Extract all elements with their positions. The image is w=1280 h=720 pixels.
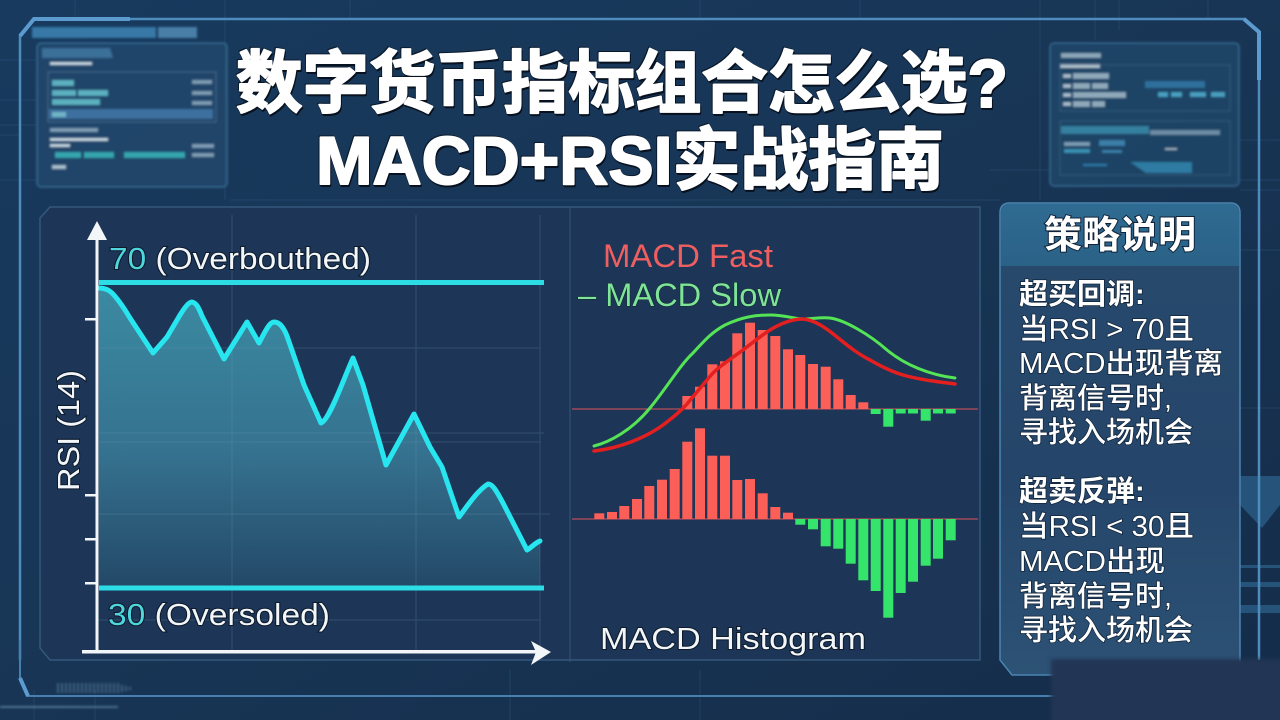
text block: oversold (1019, 475, 1194, 647)
panel body (1000, 203, 1240, 675)
panel: top-left dashboard (32, 27, 227, 187)
title: 数字货币指标组合怎么选? (236, 46, 1008, 122)
oversold line (99, 586, 544, 590)
panel: strategy notes (1000, 203, 1240, 675)
RSI shaded area (99, 288, 540, 588)
upper histogram red bars (682, 323, 868, 409)
label: MACD Histogram: MACD Histogram (600, 621, 866, 656)
text block: overbought (1019, 278, 1223, 449)
text block: overbought: 超买回调: (1019, 278, 1145, 311)
axes (82, 221, 551, 665)
legend: MACD Slow: – MACD Slow (578, 277, 782, 313)
right side decorative bands (1240, 476, 1280, 613)
text block: overbought: 背离信号时, (1019, 382, 1172, 415)
panel: charts (40, 207, 980, 662)
text block: oversold: 超卖反弹: (1019, 475, 1145, 508)
overbought line (99, 280, 544, 285)
MACD fast curve (594, 319, 955, 451)
text block: oversold: 背离信号时, (1019, 580, 1172, 613)
legend: MACD Fast: MACD Fast (603, 238, 773, 274)
RSI curve (99, 288, 540, 550)
lower histogram red bars (594, 428, 793, 519)
title (236, 46, 1008, 199)
text block: oversold: 寻找入场机会 (1019, 614, 1193, 647)
heading: 策略说明 (1044, 215, 1196, 257)
MACD slow curve (594, 315, 955, 446)
text block: overbought: MACD出现背离 (1019, 347, 1223, 380)
label: RSI (14): RSI (14) (51, 370, 86, 491)
title: MACD+RSI实战指南 (316, 123, 944, 199)
chart: RSI line chart (51, 215, 551, 665)
watermark blur (1051, 659, 1280, 720)
bottom-left ruler ticks (0, 683, 130, 707)
header band (1001, 204, 1239, 266)
text block: overbought: 当RSI > 70且 (1019, 313, 1194, 346)
label: 70 overbought: 70 (Overbouthed) (109, 241, 371, 276)
upper histogram green bars (871, 409, 956, 427)
text block: overbought: 寻找入场机会 (1019, 416, 1193, 449)
chart: MACD (572, 238, 978, 656)
label: 30 oversold: 30 (Oversoled) (108, 597, 330, 632)
text block: oversold: 当RSI < 30且 (1019, 510, 1194, 543)
zero lines (572, 409, 978, 519)
text block: oversold: MACD出现 (1019, 545, 1165, 578)
panel: top-right dashboard (1050, 43, 1239, 186)
lower histogram green bars (795, 519, 956, 618)
